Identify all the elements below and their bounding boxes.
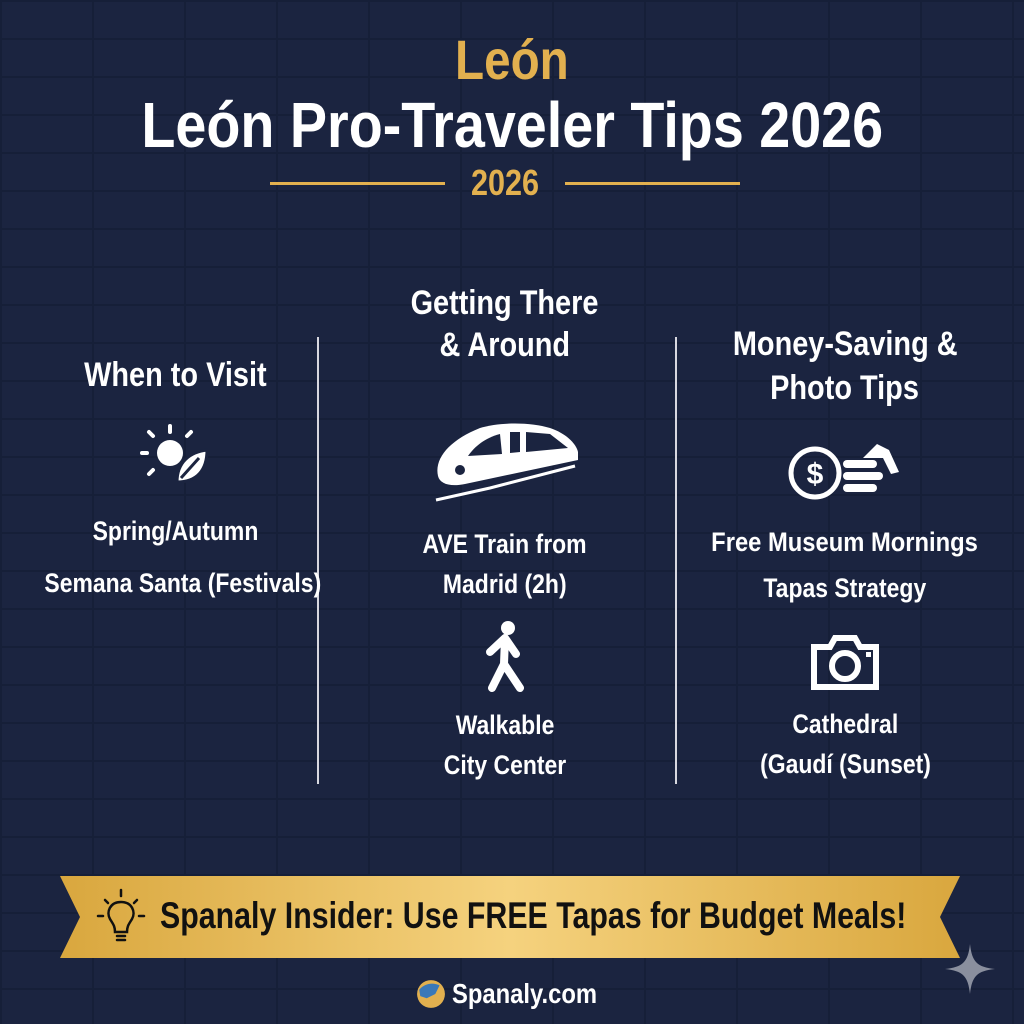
text: photo tips: Cathedral (792, 709, 898, 739)
text: money tips: Free Museum Mornings (712, 527, 978, 557)
text: photo tips (760, 709, 930, 779)
text: walkable: City Center (444, 750, 566, 780)
heading: money-saving (733, 325, 957, 407)
heading: money-saving: Money-Saving & (733, 325, 957, 363)
icon: globe logo (417, 980, 445, 1008)
text: AVE train (423, 529, 587, 599)
text: photo tips: (Gaudí (Sunset) (760, 749, 930, 779)
text: season tips (44, 516, 321, 598)
subtitle year with rules: 2026 (471, 162, 539, 203)
heading: getting there (411, 284, 599, 364)
icon: sparkle (946, 944, 994, 994)
panel: getting there (411, 284, 599, 780)
text: money tips (712, 527, 978, 603)
text: season tips: Spring/Autumn (92, 516, 258, 546)
text: AVE train: AVE Train from (423, 529, 587, 559)
text: insider tip: Spanaly Insider: Use FREE Tapas for Budget Meals! (160, 895, 906, 936)
text: walkable (444, 710, 566, 780)
main title: León Pro-Traveler Tips 2026 (141, 89, 883, 161)
heading: when to visit: When to Visit (84, 356, 266, 394)
heading: getting there: Getting There (411, 284, 599, 322)
panel: when to visit (44, 356, 321, 598)
title: León: León (455, 28, 569, 91)
text: walkable: Walkable (456, 710, 554, 740)
footer: logo and site: Spanaly.com (452, 978, 597, 1009)
text: season tips: Semana Santa (Festivals) (44, 568, 321, 598)
icon: light bulb (96, 888, 146, 942)
icon: walking person (486, 621, 524, 692)
text: money tips: Tapas Strategy (764, 573, 926, 603)
text: AVE train: Madrid (2h) (443, 569, 567, 599)
panel: money and photo (712, 325, 978, 779)
icon: camera (811, 635, 879, 690)
icon: coin and hand: $ (807, 458, 824, 491)
icon: train (436, 424, 578, 502)
heading: getting there: & Around (440, 326, 570, 364)
subtitle year with rules (270, 162, 740, 203)
banner: insider tip (60, 876, 960, 958)
icon: sun and leaf (140, 424, 206, 480)
heading: money-saving: Photo Tips (771, 369, 919, 407)
icon: coin and hand (788, 444, 899, 500)
